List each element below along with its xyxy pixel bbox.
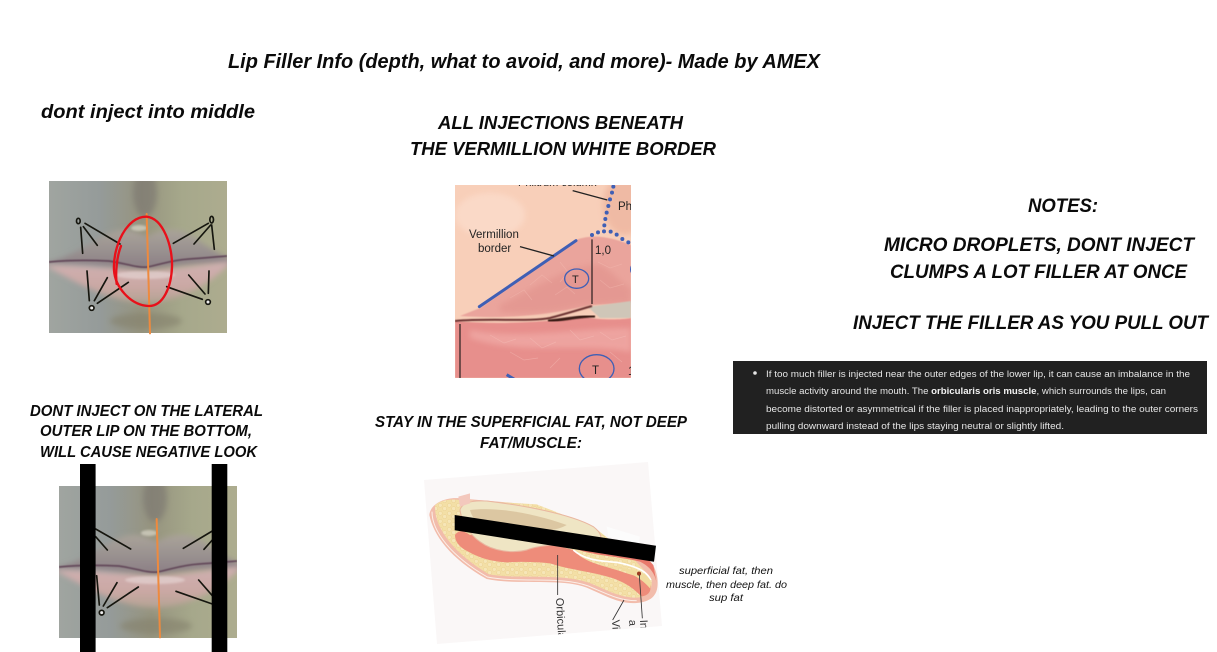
muscle xyxy=(455,531,651,597)
heading: notes: NOTES: xyxy=(1028,196,1098,217)
photo: lips with lateral areas blocked xyxy=(54,464,242,652)
heading: stay in the superficial fat: STAY IN THE SUPERFICIAL FAT, NOT DEEP xyxy=(375,414,687,431)
heading: all injections beneath the vermillion white border: ALL INJECTIONS BENEATH xyxy=(437,112,684,133)
upper lip xyxy=(460,237,631,317)
diagram: lip cross-section xyxy=(429,493,658,634)
teeth xyxy=(588,301,631,318)
outer skin band xyxy=(429,498,658,603)
caption: superficial fat order: superficial fat, then xyxy=(679,565,773,577)
rotated side labels: Orbicular xyxy=(553,598,567,643)
diagram: vermillion border close-up: Philtrum column xyxy=(518,177,597,189)
caption: superficial fat order: sup fat xyxy=(709,592,744,604)
heading: all injections beneath the vermillion white border: THE VERMILLION WHITE BORDER xyxy=(410,138,717,159)
photo: lips with injection map and red no-go oval xyxy=(44,169,232,333)
caption: superficial fat order: muscle, then deep fat. do xyxy=(666,579,787,591)
mouth line xyxy=(455,306,592,321)
diagram: vermillion border close-up xyxy=(455,185,631,378)
fat layer xyxy=(435,500,652,598)
diagram: vermillion border close-up: 1,0 xyxy=(595,245,611,257)
callout: dark panel explanation: pulling downward instead of the lips staying neutral or slightly lifted. xyxy=(766,421,1064,432)
diagram: vermillion border close-up: border xyxy=(478,243,511,255)
callout: dark panel explanation: muscle activity around the mouth. The orbicularis oris muscle, which surrounds the lips, can xyxy=(766,386,1166,397)
heading: dont inject on lateral outer lip: DONT INJECT ON THE LATERAL xyxy=(30,403,263,420)
lower lip xyxy=(455,317,631,378)
black redaction bar xyxy=(455,515,656,562)
text block: micro droplets note xyxy=(884,235,1195,283)
callout: dark panel explanation xyxy=(733,361,1207,434)
diagram: vermillion border close-up: T xyxy=(572,274,579,286)
heading: all injections beneath the vermillion white border xyxy=(410,112,717,159)
diagram: vermillion border close-up: 1 xyxy=(628,366,634,378)
heading: dont inject on lateral outer lip xyxy=(30,403,263,461)
heading: dont inject into middle: dont inject into middle xyxy=(41,101,255,123)
diagram: vermillion border close-up: Vermillion xyxy=(469,229,519,241)
mucosa xyxy=(578,550,656,582)
text block: micro droplets note: CLUMPS A LOT FILLER AT ONCE xyxy=(890,262,1188,283)
white subskin line xyxy=(432,512,637,601)
diagram: lip cross-section: In xyxy=(637,620,649,629)
heading: dont inject on lateral outer lip: OUTER LIP ON THE BOTTOM, xyxy=(40,423,252,440)
labels and measures xyxy=(460,185,637,383)
text block: micro droplets note: MICRO DROPLETS, DONT INJECT xyxy=(884,235,1195,256)
bone xyxy=(460,501,601,552)
annotations: injection lines xyxy=(96,519,212,637)
callout: dark panel explanation: become distorted or asymmetrical if the filler is placed inappropriately, leading to the outer corners xyxy=(766,404,1198,415)
title: Lip Filler Info (depth, what to avoid, and more)- Made by AMEX xyxy=(228,51,822,73)
bullet xyxy=(753,371,757,375)
black bar right xyxy=(212,464,227,652)
diagram: lip cross-section: a xyxy=(626,620,638,627)
annotations: injection lines and red oval xyxy=(76,214,214,333)
heading: dont inject on lateral outer lip: WILL CAUSE NEGATIVE LOOK xyxy=(40,444,258,461)
caption: superficial fat order xyxy=(666,565,787,604)
diagram: vermillion border close-up: Ph xyxy=(618,201,632,213)
diagram: vermillion border close-up: T xyxy=(592,365,599,377)
black bar left xyxy=(80,464,96,652)
diagram: lip cross-section: Vi xyxy=(609,620,621,630)
heading: stay in the superficial fat xyxy=(375,414,687,452)
text block: inject as you pull out: INJECT THE FILLER AS YOU PULL OUT xyxy=(853,313,1209,334)
heading: stay in the superficial fat: FAT/MUSCLE: xyxy=(480,435,582,452)
callout: dark panel explanation: If too much filler is injected near the outer edges of the lower lip, it can cause an imbalance in the xyxy=(766,369,1190,380)
